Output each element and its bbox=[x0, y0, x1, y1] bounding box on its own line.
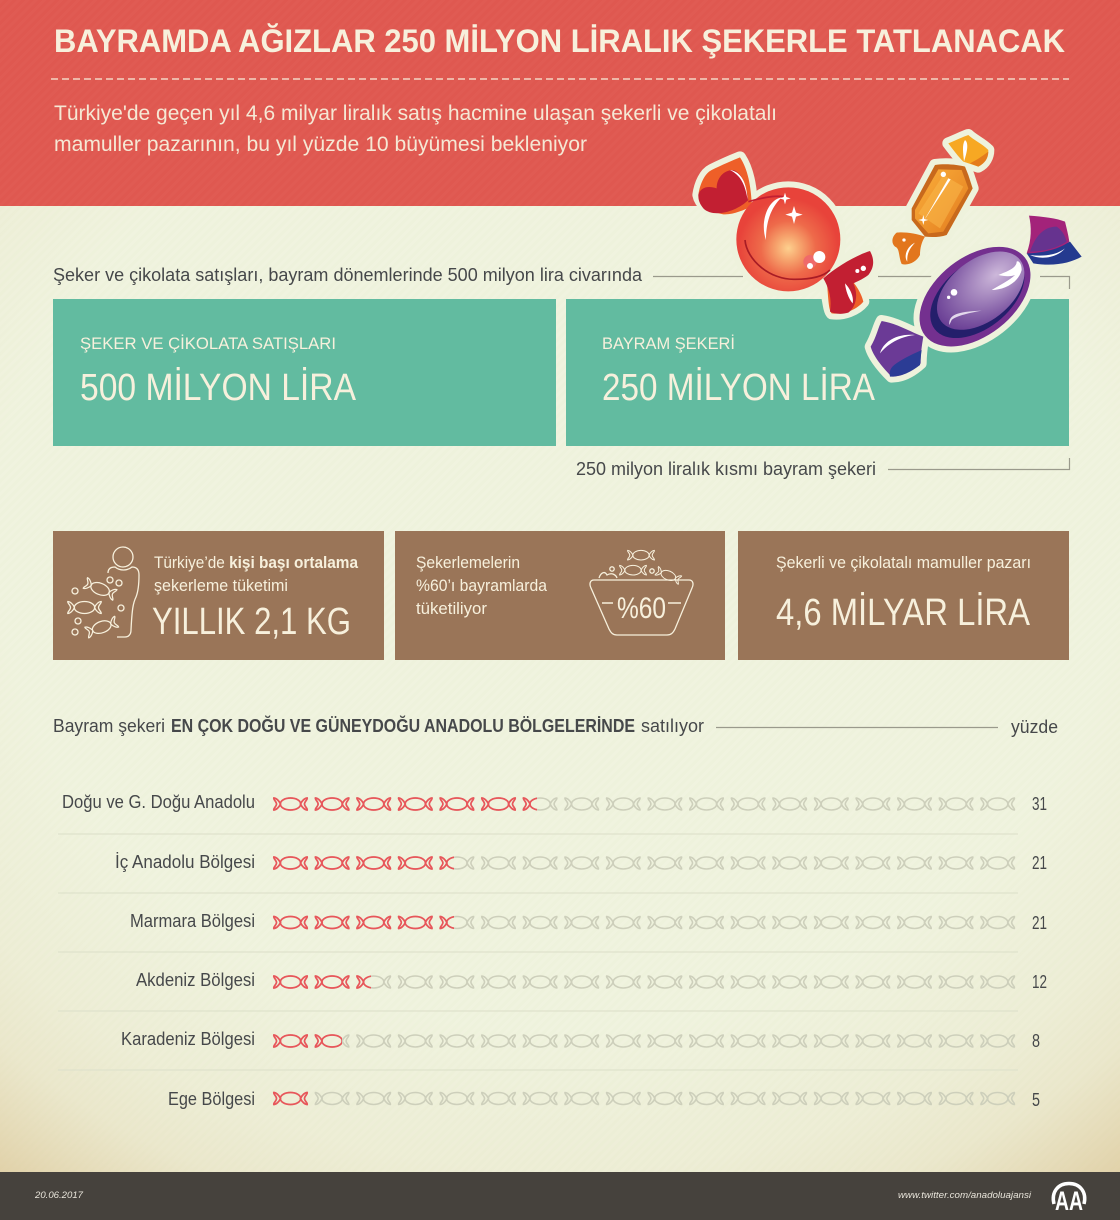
row: İç Anadolu Bölgesi: 21 bbox=[1032, 853, 1047, 873]
icon: person with candies bbox=[68, 547, 139, 638]
row: İç Anadolu Bölgesi: İç Anadolu Bölgesi bbox=[115, 852, 255, 872]
chart heading: EN ÇOK DOĞU VE GÜNEYDOĞU ANADOLU BÖLGELERİNDE bbox=[171, 715, 635, 736]
logo: AA bbox=[1053, 1184, 1085, 1216]
icon: red candy bbox=[698, 157, 873, 314]
connector line top bbox=[653, 276, 1070, 289]
panel: per capita consumption: Türkiye’de kişi başı ortalama bbox=[154, 553, 358, 572]
panel: market size: Şekerli ve çikolatalı mamuller pazarı bbox=[776, 553, 1031, 572]
row: Marmara Bölgesi: Marmara Bölgesi bbox=[130, 911, 255, 931]
panel: 500 milyon lira: 500 MİLYON LİRA bbox=[80, 366, 357, 409]
row: Doğu ve G. Doğu Anadolu: Doğu ve G. Doğu Anadolu bbox=[62, 792, 255, 812]
panel: market size: 4,6 MİLYAR LİRA bbox=[776, 591, 1031, 634]
row: Akdeniz Bölgesi: 12 bbox=[1032, 972, 1047, 992]
twitter address: www.twitter.com/anadoluajansi bbox=[898, 1190, 1032, 1201]
row: Ege Bölgesi bbox=[168, 1089, 1040, 1110]
icon: orange candy bbox=[892, 135, 988, 264]
row: Akdeniz Bölgesi: Akdeniz Bölgesi bbox=[136, 970, 255, 990]
row: Ege Bölgesi: 5 bbox=[1032, 1090, 1040, 1110]
panel: per capita consumption bbox=[53, 531, 384, 660]
row: Karadeniz Bölgesi: 8 bbox=[1032, 1031, 1040, 1051]
subtitle bbox=[54, 102, 777, 156]
chart heading: yüzde bbox=[1011, 717, 1058, 737]
chart heading: Bayram şekeri bbox=[53, 716, 165, 736]
panel: 250 milyon lira bbox=[566, 299, 1069, 446]
note: 250 milyon: 250 milyon liralık kısmı bayram şekeri bbox=[576, 459, 876, 479]
panel: 60 percent in holidays: Şekerlemelerin bbox=[416, 553, 520, 572]
row: Marmara Bölgesi: 21 bbox=[1032, 913, 1047, 933]
logo: AA: AA bbox=[1055, 1186, 1083, 1216]
panel: 250 milyon lira: 250 MİLYON LİRA bbox=[602, 366, 876, 409]
chart heading: satılıyor bbox=[641, 716, 704, 736]
footer bar bbox=[0, 1172, 1120, 1220]
panel: 500 milyon lira: ŞEKER VE ÇİKOLATA SATIŞLARI bbox=[80, 334, 336, 353]
subtitle: mamuller pazarının, bu yıl yüzde 10 büyümesi bekleniyor bbox=[54, 133, 587, 156]
panel: market size bbox=[738, 531, 1069, 660]
panel: 500 milyon lira bbox=[53, 299, 556, 446]
chart heading bbox=[53, 715, 1058, 737]
chart: regional candy sales bbox=[58, 792, 1047, 1110]
row: Doğu ve G. Doğu Anadolu: 31 bbox=[1032, 794, 1047, 814]
title: BAYRAMDA AĞIZLAR 250 MİLYON LİRALIK ŞEKERLE TATLANACAK bbox=[54, 23, 1065, 59]
row: Doğu ve G. Doğu Anadolu bbox=[63, 794, 1046, 812]
panel: 60 percent in holidays: %60 bbox=[617, 592, 666, 625]
date: 20.06.2017 bbox=[34, 1190, 84, 1201]
note: 250 milyon bbox=[576, 458, 1070, 479]
row: Karadeniz Bölgesi bbox=[122, 1032, 1040, 1049]
header band bbox=[0, 0, 1120, 206]
panel: 60 percent in holidays: tüketiliyor bbox=[416, 599, 487, 618]
panel: 60 percent in holidays bbox=[395, 531, 725, 660]
row: Karadeniz Bölgesi: Karadeniz Bölgesi bbox=[121, 1029, 255, 1049]
icon: purple candy bbox=[871, 216, 1082, 377]
panel: 60 percent in holidays: %60’ı bayramlarda bbox=[416, 576, 547, 595]
subtitle: Türkiye'de geçen yıl 4,6 milyar liralık satış hacmine ulaşan şekerli ve çikolatalı bbox=[54, 102, 777, 125]
panel: 250 milyon lira: BAYRAM ŞEKERİ bbox=[602, 334, 735, 353]
row: Ege Bölgesi: Ege Bölgesi bbox=[168, 1089, 255, 1109]
row: İç Anadolu Bölgesi bbox=[115, 852, 1047, 873]
row: Marmara Bölgesi bbox=[131, 914, 1046, 931]
row: Akdeniz Bölgesi bbox=[136, 972, 1046, 990]
panel: per capita consumption: şekerleme tüketimi bbox=[154, 576, 288, 595]
panel: per capita consumption: YILLIK 2,1 KG bbox=[152, 601, 351, 643]
sales intro text: Şeker ve çikolata satışları, bayram dönemlerinde 500 milyon lira civarında bbox=[53, 265, 643, 285]
icon: candy bowl bbox=[590, 550, 693, 635]
